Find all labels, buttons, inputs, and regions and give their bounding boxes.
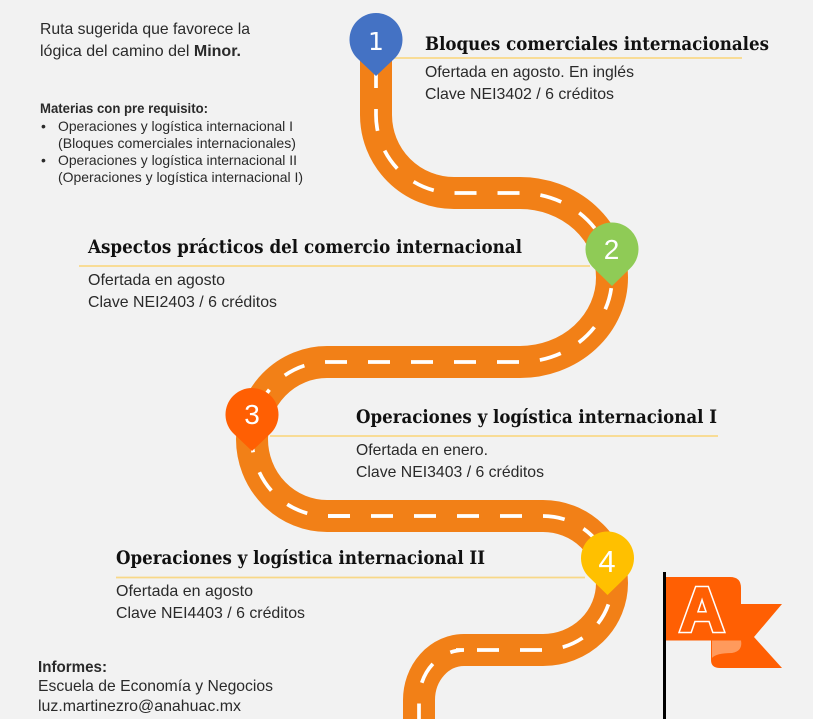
step 4 (116, 532, 634, 622)
prerequisites list: (Operaciones y logística internacional I) (58, 169, 303, 185)
heading 4: Operaciones y logística internacional II (116, 548, 485, 569)
intro text: lógica del camino del Minor. (40, 43, 241, 60)
details 2: Clave NEI2403 / 6 créditos (88, 294, 277, 311)
pin 1 (349, 13, 402, 76)
pin 3: 3 (244, 399, 260, 430)
heading 2: Aspectos prácticos del comercio internacional (87, 237, 522, 258)
prerequisites list: Operaciones y logística internacional I (58, 118, 293, 134)
pin 3 (225, 388, 278, 451)
prerequisites list: (Bloques comerciales internacionales) (58, 135, 296, 151)
details 3: Clave NEI3403 / 6 créditos (356, 464, 544, 481)
intro text: Ruta sugerida que favorece la (40, 21, 250, 38)
pin 1: 1 (368, 27, 384, 56)
details 4 (116, 583, 305, 622)
pin 4: 4 (598, 544, 616, 579)
step 1 (349, 13, 769, 103)
details 2 (88, 272, 277, 311)
details 2: Ofertada en agosto (88, 272, 225, 289)
heading 1: Bloques comerciales internacionales (425, 34, 769, 55)
prerequisites list: Materias con pre requisito: (40, 100, 208, 116)
details 3: Ofertada en enero. (356, 442, 488, 459)
contact information (38, 659, 273, 715)
icon: flag: A (680, 576, 724, 645)
pin 4 (581, 532, 634, 595)
contact information: Escuela de Economía y Negocios (38, 678, 273, 695)
details 1: Ofertada en agosto. En inglés (425, 64, 634, 81)
details 1: Clave NEI3402 / 6 créditos (425, 86, 614, 103)
prerequisites list: Operaciones y logística internacional II (58, 152, 297, 168)
details 4: Ofertada en agosto (116, 583, 253, 600)
prerequisites list: • (41, 118, 46, 134)
prerequisites list: • (41, 152, 46, 168)
road (252, 40, 612, 719)
details 3 (356, 442, 544, 481)
prerequisites list (40, 100, 303, 185)
contact information: Informes: (38, 659, 107, 676)
details 4: Clave NEI4403 / 6 créditos (116, 605, 305, 622)
icon: flag: A (680, 576, 724, 645)
intro text (40, 21, 250, 60)
pin 2: 2 (604, 234, 619, 265)
step 2 (79, 223, 638, 311)
details 1 (425, 64, 634, 103)
heading 3: Operaciones y logística internacional I (356, 407, 717, 428)
contact information: luz.martinezro@anahuac.mx (38, 698, 241, 715)
icon: flag (663, 572, 782, 719)
step 3 (225, 388, 718, 481)
pin 2 (586, 223, 638, 286)
